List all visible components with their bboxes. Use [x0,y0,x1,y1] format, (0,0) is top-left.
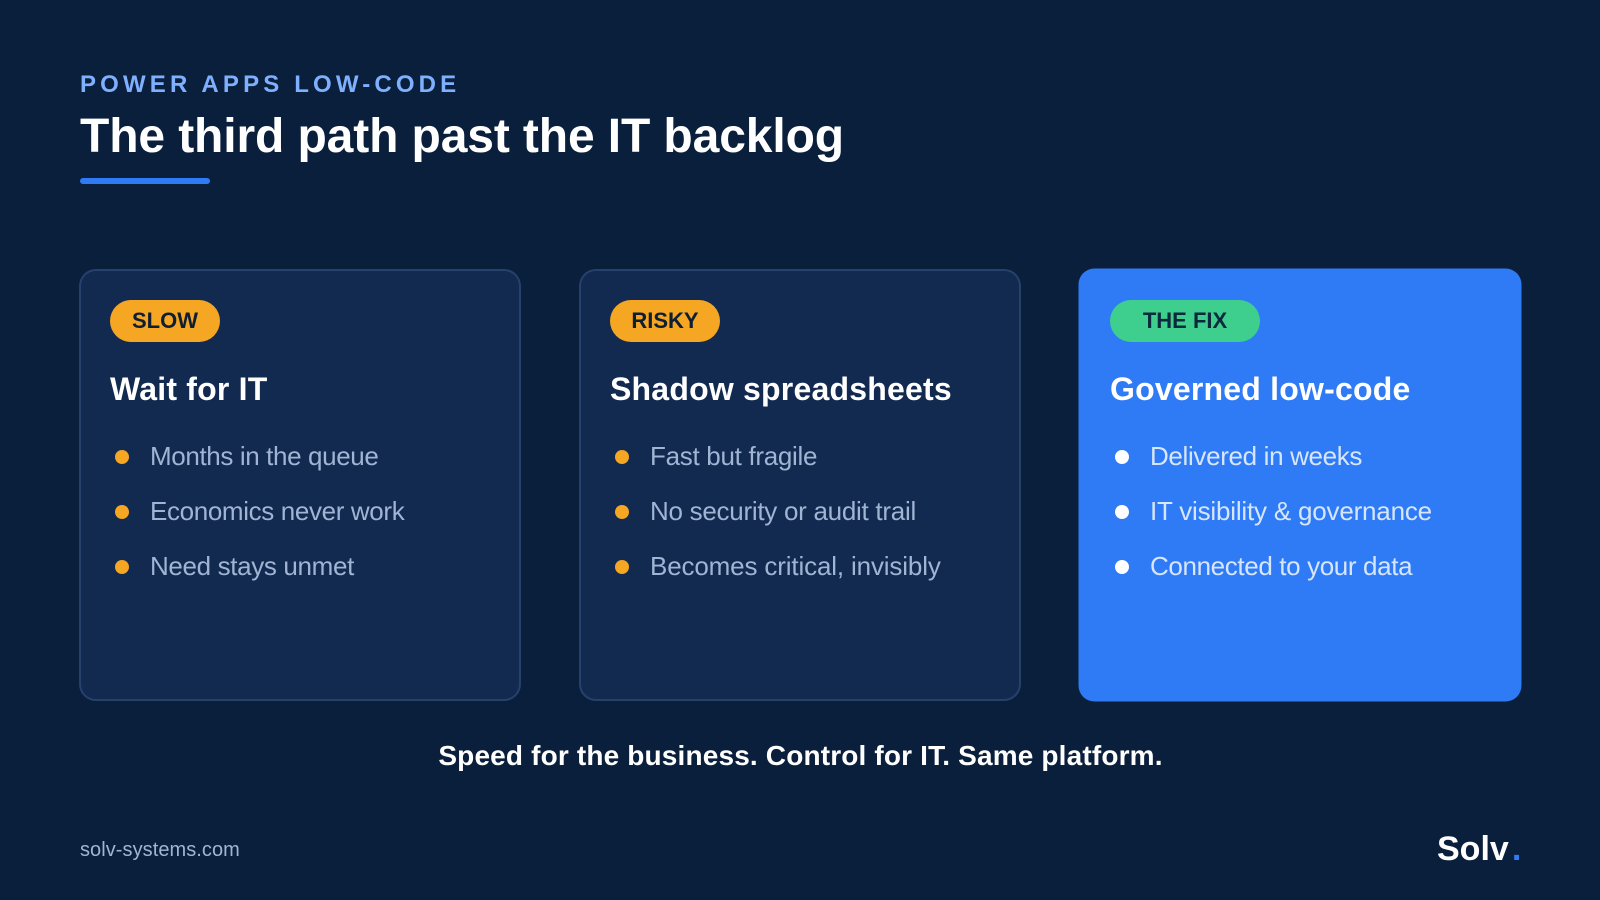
badge: slow: SLOW [132,308,198,333]
footer url: solv-systems.com [80,839,240,861]
panel: slow [79,269,521,701]
badge: risky: RISKY [631,308,699,333]
card heading: wait for it: Wait for IT [110,371,268,407]
bullet: no security: No security or audit trail [650,496,916,526]
eyebrow: POWER APPS LOW-CODE [80,71,460,98]
panel: risky [579,269,1021,701]
bullet: becomes critical: Becomes critical, invisibly [650,551,941,581]
card heading: governed low-code: Governed low-code [1110,371,1411,407]
bullet list: risky [615,441,941,581]
bullet: need stays unmet: Need stays unmet [150,551,354,581]
title: The third path past the IT backlog [80,110,844,163]
bullet: delivered in weeks: Delivered in weeks [1150,441,1362,471]
bullet: connected to data: Connected to your data [1150,551,1412,581]
bullet list: the fix [1115,441,1432,581]
tagline: Speed for the business. Control for IT. Same platform. [438,740,1163,771]
bullet: it visibility: IT visibility & governance [1150,496,1432,526]
bullet: months in the queue: Months in the queue [150,441,378,471]
card heading: shadow spreadsheets: Shadow spreadsheets [610,371,952,407]
badge: the fix: THE FIX [1143,308,1227,333]
logo: Solv. [1437,830,1521,868]
badge: the fix [1110,300,1260,342]
bullet list: slow [115,441,405,581]
badge: risky [610,300,720,342]
bullet: economics never work: Economics never work [150,496,404,526]
bullet: fast but fragile: Fast but fragile [650,441,817,471]
title underline [80,178,210,184]
badge: slow [110,300,220,342]
panel: the fix [1078,268,1522,702]
